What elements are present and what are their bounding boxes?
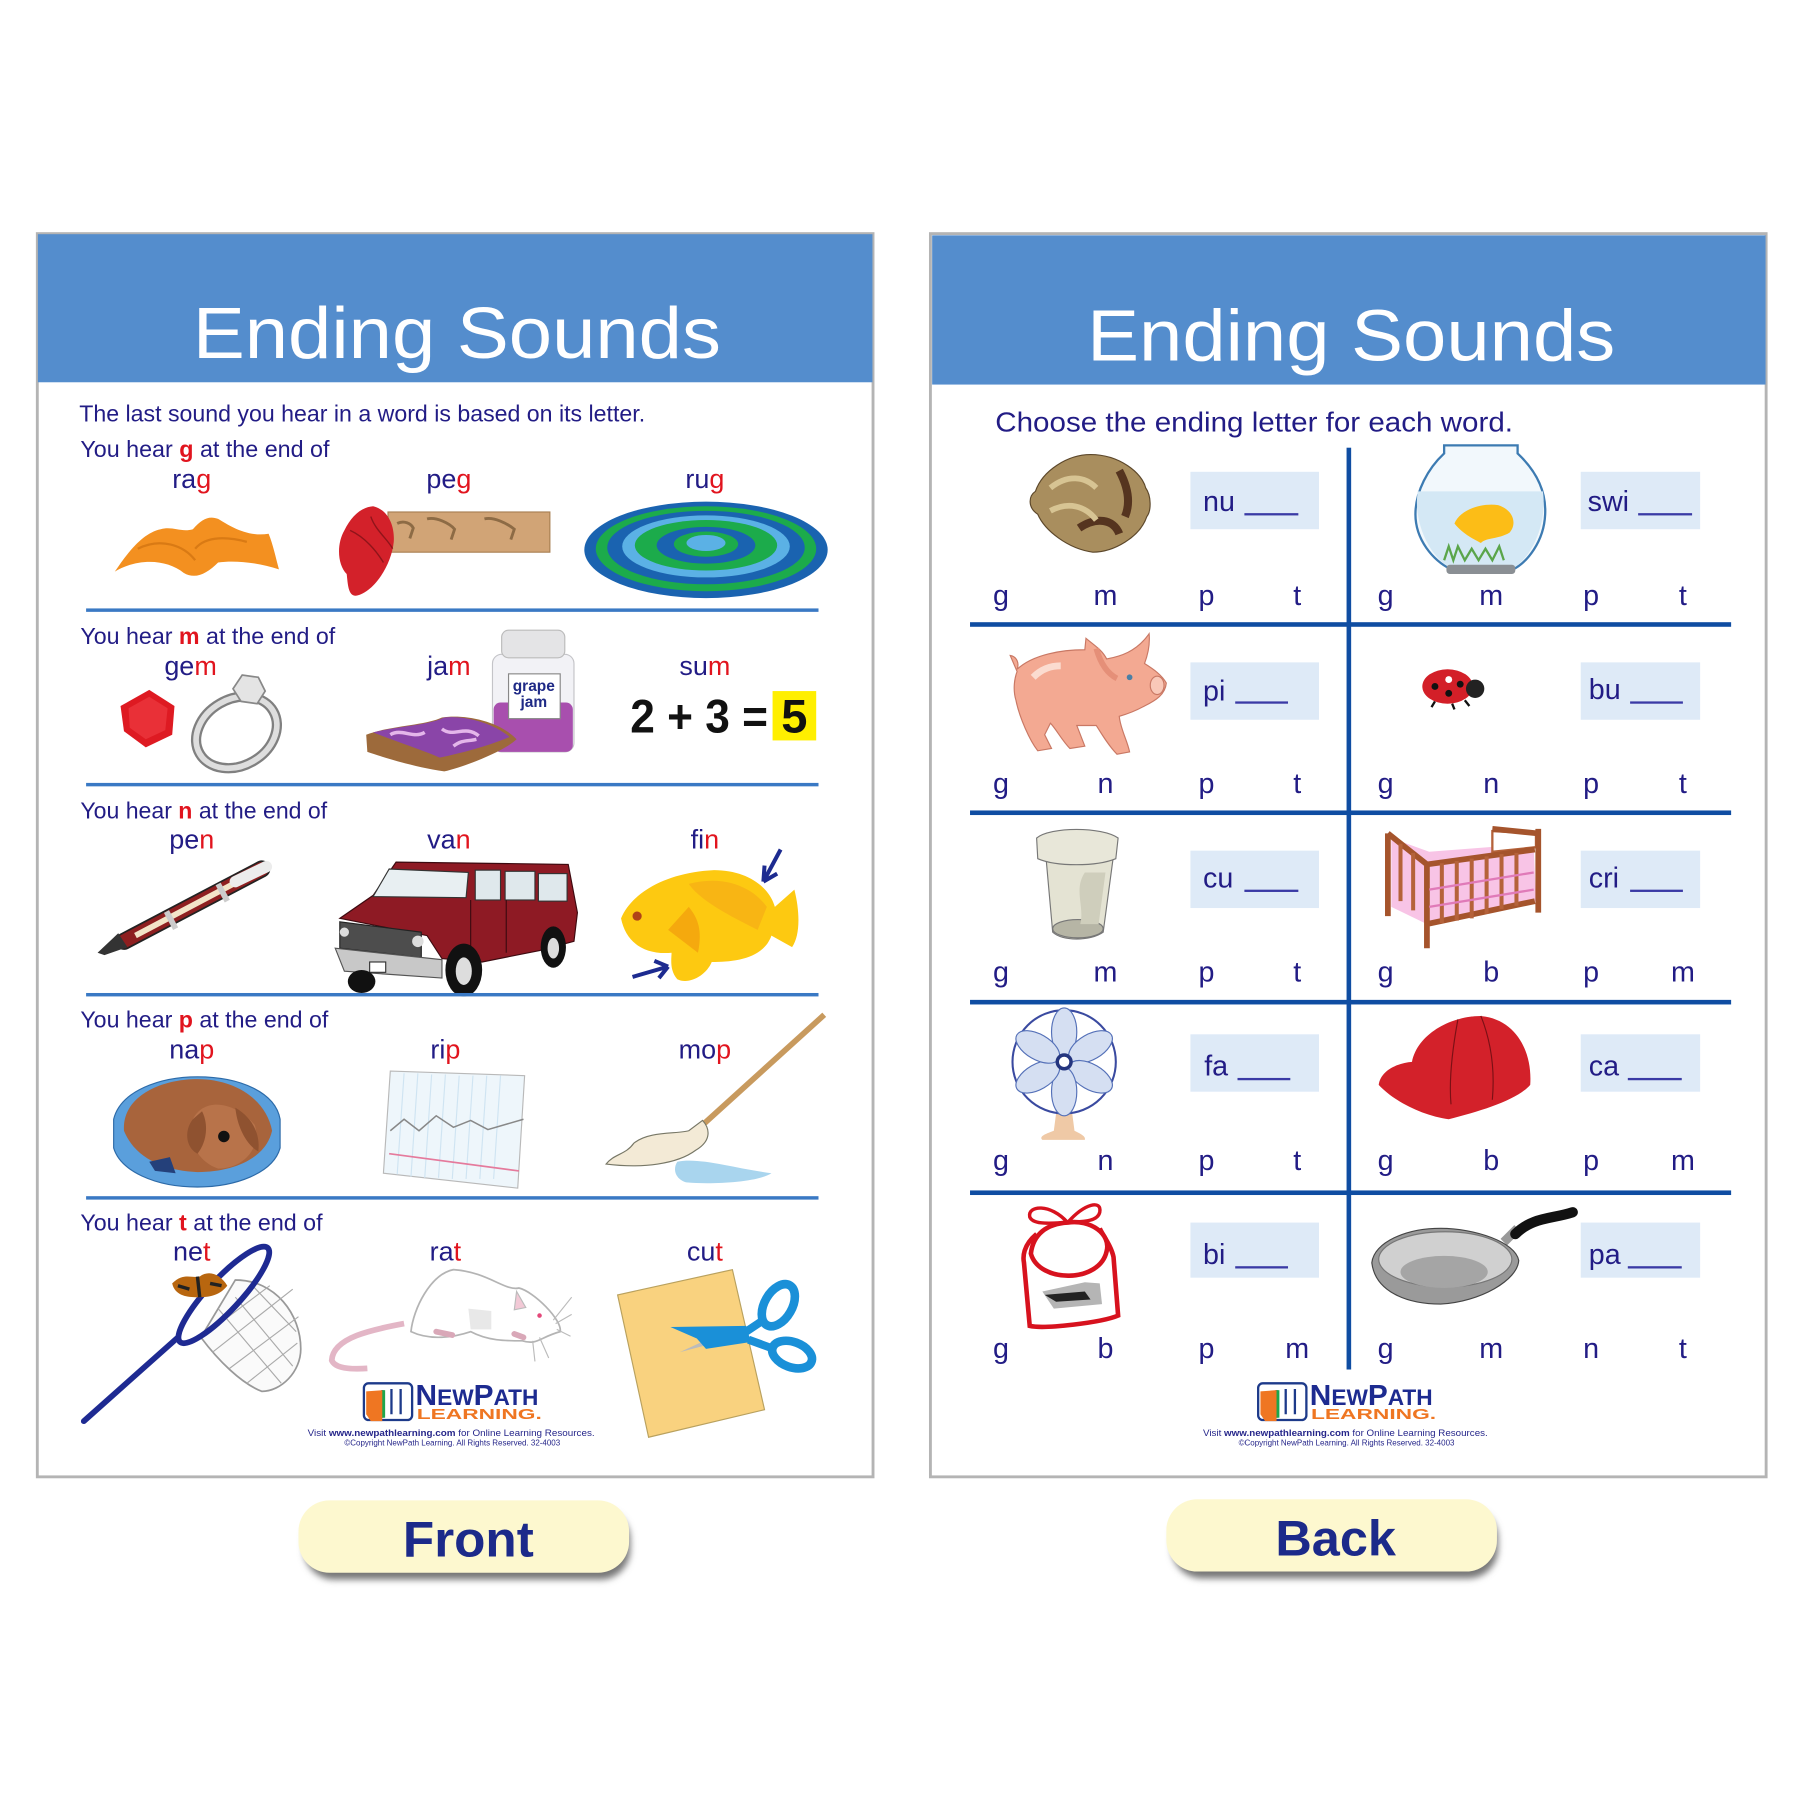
row: ending m [80,623,816,782]
cell: crib [1388,829,1700,948]
answer choices: m [1479,580,1503,612]
row: ending g [80,436,828,598]
row: ending n: You hear n at the end of [80,797,328,823]
logo: NewPath front: NEWPATH [416,1380,538,1412]
row: ending p: nap [169,1034,214,1064]
row: ending t: cut [687,1236,723,1266]
answer choices: n [1098,768,1113,800]
cell: cap [1379,1016,1700,1119]
icon: toast with jam [366,717,517,771]
icon: peg with cap [339,506,550,596]
icon: red van [335,862,577,996]
answer choices: p [1199,1333,1214,1365]
icon: yellow fish with arrows [621,849,798,981]
answer choices: m [1094,957,1117,989]
icon: bib [1024,1205,1118,1327]
header band: back [932,235,1766,385]
panel: back card [930,234,1766,1477]
answer choices: g [1378,957,1394,989]
cell: pan [1372,1212,1700,1304]
answer choices: t [1293,768,1301,800]
title: front: Ending Sounds [193,294,721,374]
icon: fishbowl [1415,445,1545,574]
panel: front card [37,234,873,1477]
answer choices: g [993,768,1009,800]
row: ending g: You hear g at the end of [80,436,330,462]
footer text: front: Visit www.newpathlearning.com for Online Learning Resources. [308,1428,595,1439]
logo: NewPath back: LEARNING. [1311,1407,1436,1423]
row: ending p: You hear p at the end of [80,1006,329,1032]
icon: red cap [1379,1016,1530,1119]
icon: pen [98,867,266,955]
icon: walnut [1030,455,1150,552]
equation: 2 + 3 = [630,689,768,742]
answer choices: p [1199,768,1214,800]
cell: nut [1030,455,1319,552]
answer choices: p [1199,1145,1214,1177]
icon: jam jar [492,630,574,752]
icon: white rat [332,1270,572,1369]
icon: jam jar: jam [519,694,547,711]
cell: bib: bi [1203,1239,1225,1271]
icon: butterfly net [84,1237,301,1421]
footer text: back [1203,1428,1488,1447]
cell: swim: swi [1588,486,1629,518]
answer choices: g [993,957,1009,989]
cell: nut: nu [1203,486,1235,518]
answer choices: p [1583,580,1599,612]
logo: NewPath back: NEWPATH [1310,1380,1433,1412]
row: ending t [80,1210,816,1437]
cell: cap: ca [1589,1051,1619,1083]
button: Back: Back [1275,1509,1397,1566]
intro text: The last sound you hear in a word is based on its letter. [79,400,645,426]
cell: pig: pi [1203,675,1225,707]
row: ending n: fin [691,824,719,854]
footer text: front [308,1428,595,1447]
answer choices: g [993,1145,1009,1177]
icon: rug [584,502,828,598]
answer choices: m [1094,580,1117,612]
cell: cup [1037,829,1319,939]
row: ending g: peg [426,464,471,494]
row: ending m: sum [679,651,730,681]
answer choices: b [1483,957,1499,989]
row: ending m: gem [164,651,217,681]
button: Front [298,1500,630,1580]
answer choices: g [1378,768,1394,800]
answer choices: t [1679,768,1687,800]
button: Front: Front [403,1511,534,1568]
answer choices [993,580,1695,1365]
cell: fan [1011,1008,1319,1140]
icon: frying pan [1372,1212,1573,1304]
icon: rag [115,518,279,576]
icon: crib [1388,829,1538,948]
cell: cup: cu [1203,862,1233,894]
cell: pig [1010,634,1319,754]
icon: paper and scissors [618,1270,816,1437]
icon: red gem [121,690,174,747]
cell: bug [1422,662,1700,720]
answer choices: g [1378,1145,1394,1177]
row: ending t: rat [430,1236,462,1266]
icon: diamond ring [183,675,290,782]
cell: pan: pa [1589,1239,1621,1271]
cell: fan: fa [1204,1051,1228,1083]
icon: sleeping dog in bed [114,1077,280,1187]
answer choices: p [1199,957,1214,989]
answer choices: p [1583,768,1599,800]
answer choices: t [1679,580,1687,612]
row: ending n: pen [169,824,214,854]
logo: NewPath front: LEARNING. [417,1407,542,1423]
row: ending g: rag [172,464,211,494]
answer choices: t [1293,1145,1301,1177]
answer choices: g [993,1333,1009,1365]
row: ending m: jam [426,651,471,681]
row: ending m: You hear m at the end of [80,623,336,649]
row: ending p: rip [430,1034,460,1064]
answer choices: p [1583,1145,1599,1177]
answer choices: m [1671,957,1695,989]
row: ending g: rug [685,464,724,494]
footer text: front: ©Copyright NewPath Learning. All Rights Reserved. 32-4003 [344,1438,561,1447]
answer choices: n [1483,768,1499,800]
row: ending n [80,797,798,996]
cell: bib [1024,1205,1319,1327]
icon: pig [1010,634,1166,754]
footer text: back: Visit www.newpathlearning.com for Online Learning Resources. [1203,1428,1488,1439]
instructions: Choose the ending letter for each word. [995,407,1513,438]
answer choices: t [1679,1333,1687,1365]
logo: NewPath back [1258,1380,1436,1423]
button: Back [1166,1499,1498,1578]
icon: jam jar: grape [513,678,555,695]
answer choices: p [1199,580,1214,612]
answer choices: g [1378,1333,1394,1365]
icon: mop [606,1015,824,1183]
cell: bug: bu [1589,674,1621,706]
answer choices: g [1378,580,1394,612]
answer choices: m [1671,1145,1695,1177]
answer choices: g [993,580,1009,612]
row: ending t: You hear t at the end of [80,1210,323,1236]
title: back: Ending Sounds [1087,296,1615,376]
header band: front [38,234,872,382]
logo: NewPath front [364,1380,542,1423]
cell: crib: cri [1589,862,1619,894]
icon: ladybug [1422,669,1484,709]
cell: swim [1415,445,1700,574]
answer choices: b [1483,1145,1499,1177]
equation: 5 [781,689,807,742]
icon: foam cup [1037,829,1118,939]
icon: ripped paper [383,1071,525,1188]
footer text: back: ©Copyright NewPath Learning. All Rights Reserved. 32-4003 [1239,1438,1455,1447]
answer choices: t [1293,580,1301,612]
answer choices: b [1098,1333,1113,1365]
answer choices: n [1098,1145,1113,1177]
answer choices: m [1285,1333,1309,1365]
answer choices: p [1583,957,1599,989]
answer choices: n [1583,1333,1599,1365]
answer choices: m [1479,1333,1503,1365]
row: ending p: mop [679,1034,731,1064]
answer choices: t [1293,957,1301,989]
icon: fan [1011,1008,1118,1140]
row: ending p [80,1006,824,1188]
row: ending n: van [427,824,471,854]
row: ending t: net [173,1236,211,1266]
